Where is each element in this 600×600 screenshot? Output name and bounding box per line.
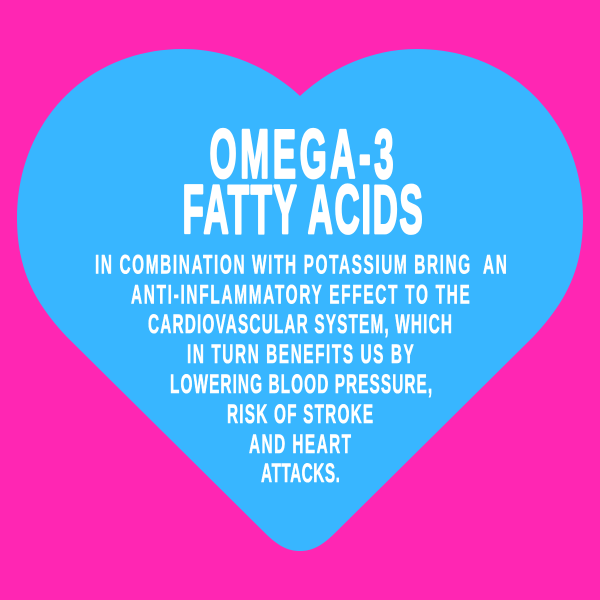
body text: IN COMBINATION WITH POTASSIUM BRING AN (95, 249, 507, 280)
body text: ANTI-INFLAMMATORY EFFECT TO THE (131, 279, 470, 310)
heart shape (17, 49, 583, 551)
body text: CARDIOVASCULAR SYSTEM, WHICH (148, 309, 452, 339)
body text: RISK OF STROKE (227, 399, 373, 429)
body text: AND HEART (249, 429, 351, 459)
body text: LOWERING BLOOD PRESSURE, (170, 369, 432, 399)
title: OMEGA-3 (210, 116, 394, 193)
body text: IN TURN BENEFITS US BY (187, 339, 414, 369)
body text: ATTACKS. (261, 458, 340, 488)
title (182, 116, 423, 248)
title: FATTY ACIDS (182, 171, 423, 248)
body text (95, 249, 507, 488)
